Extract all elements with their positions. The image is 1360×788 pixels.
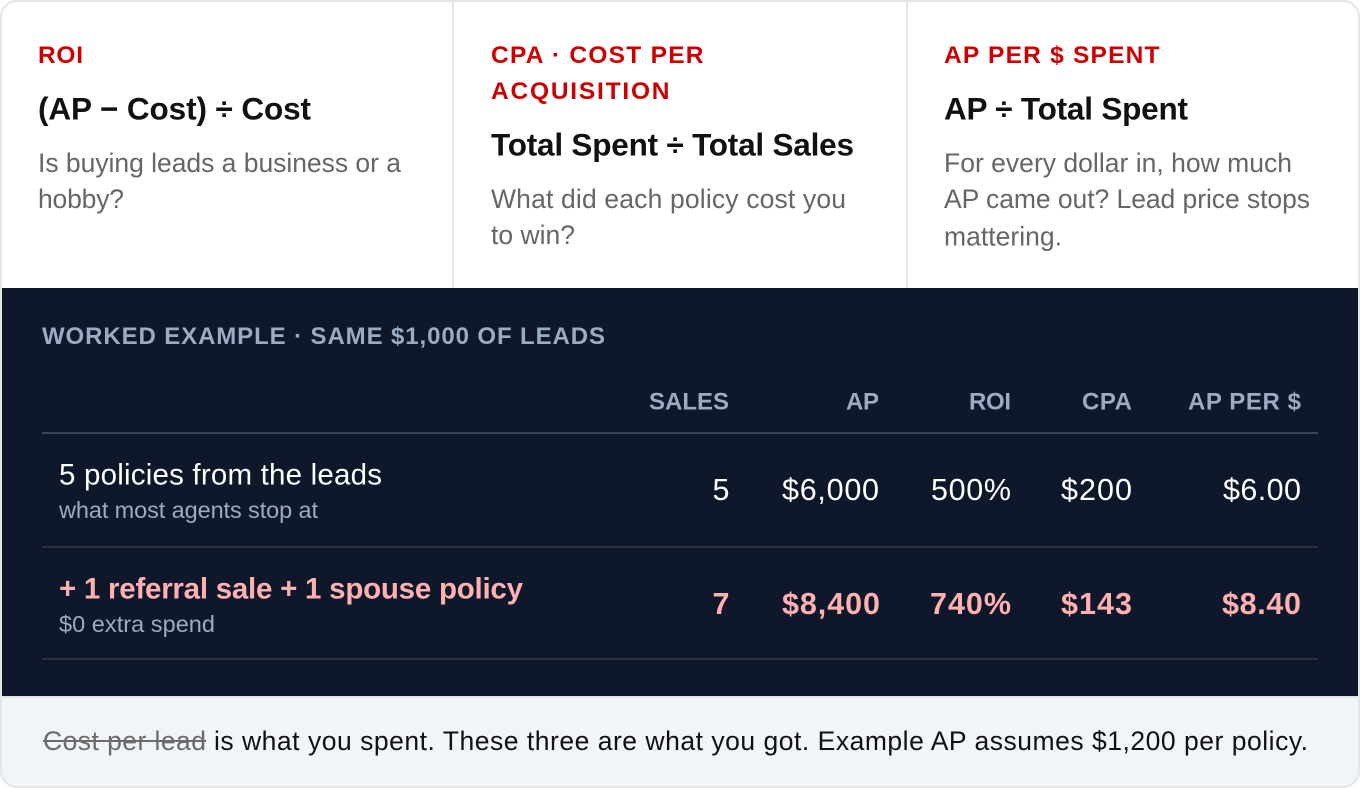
ROI formula: (AP − Cost) ÷ Cost [38, 90, 312, 126]
table header row: CPA [1082, 388, 1132, 416]
table row: referral and spouse policy: 740% [930, 587, 1011, 621]
CPA label: ACQUISITION [491, 78, 670, 105]
CPA label [491, 42, 704, 105]
table header row: ROI [969, 388, 1011, 416]
ROI description: hobby? [38, 184, 124, 214]
CPA label: CPA · COST PER [491, 42, 704, 69]
table header row: SALES [649, 388, 729, 416]
panel: worked example [2, 288, 1358, 696]
panel: ROI formula [38, 42, 401, 214]
table row: 5 policies: $6.00 [1223, 473, 1301, 507]
table header row [649, 388, 1302, 416]
table header row: AP PER $ [1188, 388, 1302, 416]
ROI description [38, 148, 401, 214]
table row: 5 policies: what most agents stop at [58, 497, 318, 523]
worked example heading: WORKED EXAMPLE · SAME $1,000 OF LEADS [42, 323, 605, 350]
AP per dollar formula: AP ÷ Total Spent [944, 90, 1188, 126]
table row: referral and spouse policy: $8,400 [782, 587, 880, 621]
table row: 5 policies [58, 458, 1301, 523]
table header row: AP [846, 388, 879, 416]
CPA description: What did each policy cost you [491, 184, 846, 214]
AP per dollar label: AP PER $ SPENT [944, 42, 1160, 69]
table row: 5 policies: 500% [931, 473, 1011, 507]
AP per dollar description [944, 148, 1310, 252]
panel: AP per dollar formula [944, 42, 1310, 252]
AP per dollar description: AP came out? Lead price stops [944, 184, 1310, 214]
CPA description: to win? [491, 220, 575, 250]
table row: referral and spouse policy: $143 [1061, 587, 1132, 621]
table row: referral and spouse policy: $0 extra spend [59, 611, 215, 637]
table row: referral and spouse policy: $8.40 [1222, 587, 1301, 621]
table row: 5 policies: $6,000 [782, 473, 879, 507]
table row: 5 policies: 5 [712, 473, 729, 507]
CPA formula: Total Spent ÷ Total Sales [491, 126, 854, 162]
table row: referral and spouse policy [59, 572, 1301, 637]
table row: referral and spouse policy: + 1 referral sale + 1 spouse policy [59, 572, 524, 606]
table row: 5 policies: 5 policies from the leads [59, 458, 382, 492]
ROI description: Is buying leads a business or a [38, 148, 401, 178]
footer note: Cost per lead [43, 726, 206, 756]
table row: 5 policies: $200 [1061, 473, 1132, 507]
ROI label: ROI [38, 42, 83, 69]
CPA description [491, 184, 846, 250]
footer note: is what you spent. These three are what you got. Example AP assumes $1,200 per policy. [214, 726, 1308, 756]
AP per dollar description: For every dollar in, how much [944, 148, 1292, 178]
AP per dollar description: mattering. [944, 222, 1062, 252]
table row: referral and spouse policy: 7 [712, 587, 729, 621]
panel: CPA formula [491, 42, 854, 250]
